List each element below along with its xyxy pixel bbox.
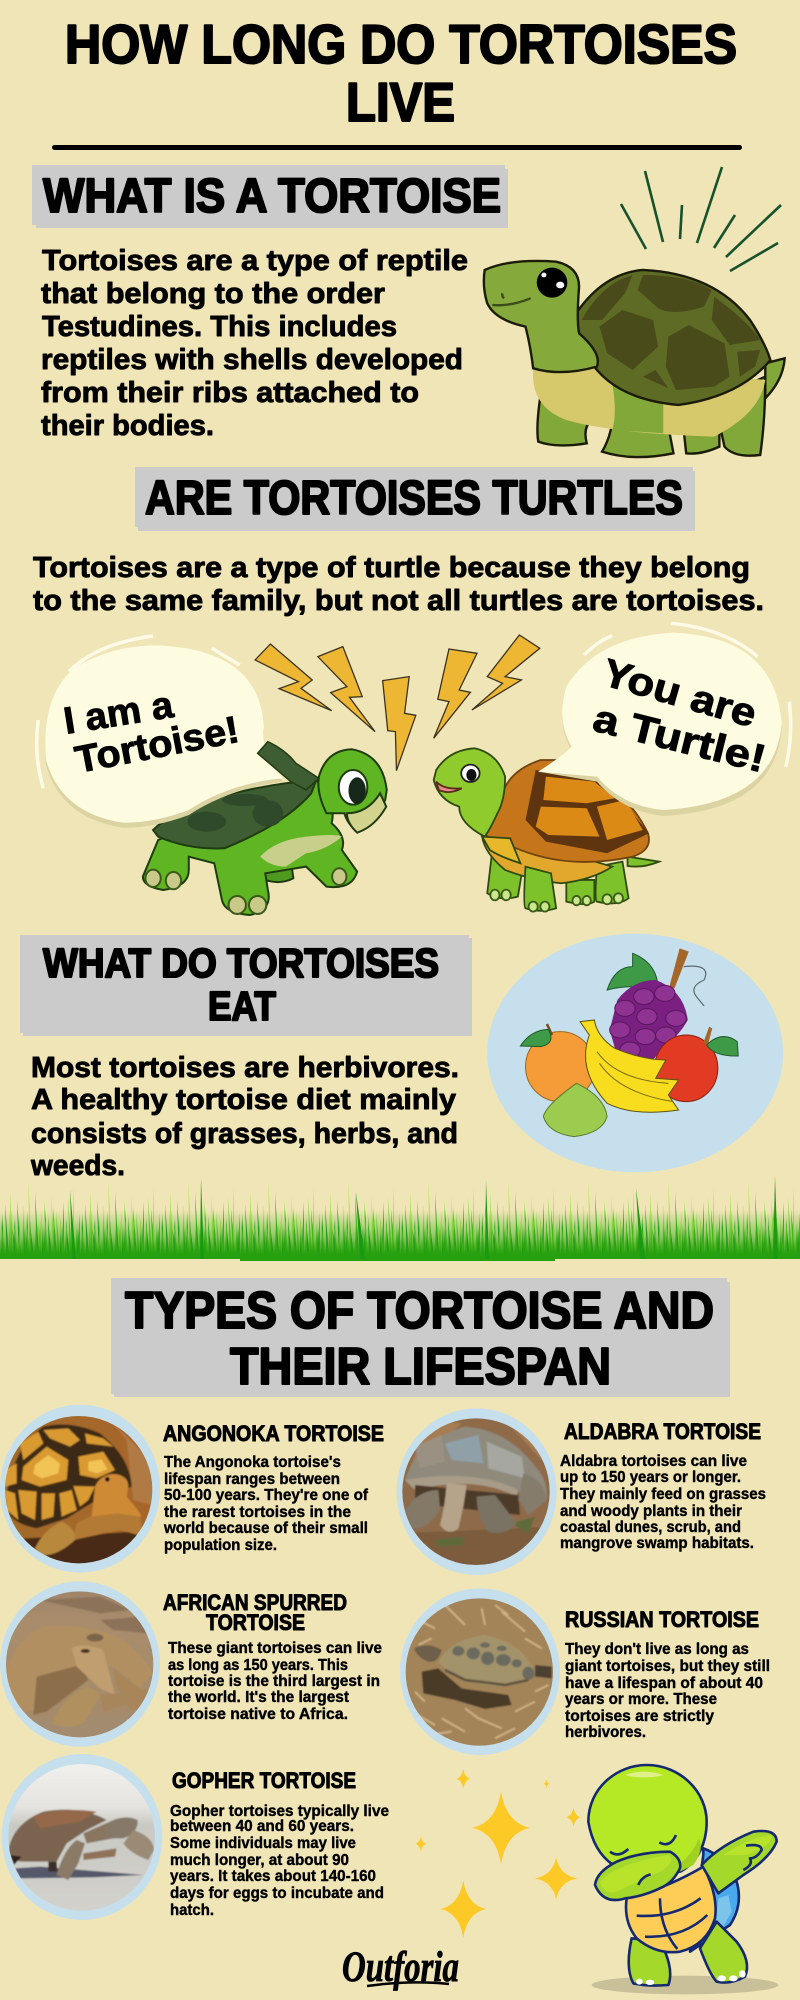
text: what do tortoises eat: A healthy tortoise diet mainly xyxy=(31,1084,456,1116)
text: russian tortoise: herbivores. xyxy=(565,1724,646,1741)
text: what is a tortoise: Tortoises are a type of reptile xyxy=(42,245,468,277)
text: are tortoises turtles: Tortoises are a type of turtle because they belong xyxy=(33,552,750,584)
text: russian tortoise: have a lifespan of about 40 xyxy=(565,1675,763,1692)
name: african spurred tortoise: TORTOISE xyxy=(206,1610,305,1635)
photo: african spurred tortoise xyxy=(0,1581,160,1747)
text: gopher tortoise xyxy=(170,1803,389,1919)
heading: are tortoises turtles: ARE TORTOISES TURTLES xyxy=(145,472,683,525)
text: what do tortoises eat: Most tortoises are herbivores. xyxy=(31,1052,459,1084)
text: what is a tortoise: Testudines. This includes xyxy=(42,311,397,343)
text: angonoka tortoise: world because of their small xyxy=(163,1520,368,1537)
photo: gopher tortoise xyxy=(2,1754,162,1920)
title: HOW LONG DO TORTOISES xyxy=(65,13,737,75)
text: are tortoises turtles: to the same family, but not all turtles are tortoises. xyxy=(33,585,764,617)
text: russian tortoise: giant tortoises, but they still xyxy=(565,1658,770,1675)
text: russian tortoise: They don't live as long as xyxy=(565,1641,749,1658)
heading: types of tortoise: THEIR LIFESPAN xyxy=(230,1338,611,1396)
heading: types of tortoise xyxy=(111,1278,730,1397)
text: angonoka tortoise xyxy=(163,1454,369,1554)
text: angonoka tortoise: lifespan ranges between xyxy=(164,1471,340,1488)
text: what is a tortoise: that belong to the order xyxy=(41,278,385,310)
name: african spurred tortoise: AFRICAN SPURRED xyxy=(163,1590,347,1615)
name: russian tortoise: RUSSIAN TORTOISE xyxy=(565,1607,759,1632)
text: african spurred tortoise: tortoise native to Africa. xyxy=(168,1706,348,1723)
title: LIVE xyxy=(346,71,455,133)
heading: what do tortoises eat: WHAT DO TORTOISES xyxy=(43,940,439,986)
panel: angonoka tortoise xyxy=(0,1405,384,1573)
text: gopher tortoise: years. It takes about 140-160 xyxy=(170,1868,376,1885)
heading: what do tortoises eat: EAT xyxy=(208,983,276,1029)
text: aldabra tortoise: coastal dunes, scrub, and xyxy=(560,1519,741,1536)
panel: aldabra tortoise xyxy=(397,1408,766,1575)
text: gopher tortoise: between 40 and 60 years. xyxy=(170,1818,354,1835)
text: angonoka tortoise: 50-100 years. They're one of xyxy=(164,1487,369,1504)
heading: types of tortoise: TYPES OF TORTOISE AND xyxy=(125,1282,714,1340)
text: russian tortoise: tortoises are strictly xyxy=(565,1708,714,1725)
icon: olive tortoise xyxy=(484,261,785,457)
photo: aldabra tortoise xyxy=(397,1408,557,1575)
text: what do tortoises eat: consists of grasses, herbs, and xyxy=(31,1118,458,1150)
callout: speech bubble left xyxy=(37,636,319,828)
text: angonoka tortoise: The Angonoka tortoise's xyxy=(164,1454,341,1471)
text: gopher tortoise: much longer, at about 90 xyxy=(170,1852,349,1869)
text: gopher tortoise: days for eggs to incubate and xyxy=(170,1885,384,1902)
text: african spurred tortoise: the world. It's the largest xyxy=(168,1689,349,1706)
text: what is a tortoise: reptiles with shells developed xyxy=(41,344,463,376)
grass strip xyxy=(0,1176,800,1261)
panel: gopher tortoise xyxy=(2,1754,389,1920)
icon: orange turtle xyxy=(434,748,659,912)
photo: angonoka tortoise xyxy=(0,1405,160,1573)
name: african spurred tortoise xyxy=(163,1590,347,1635)
text: what do tortoises eat: weeds. xyxy=(30,1150,125,1182)
text: are tortoises turtles xyxy=(33,552,764,617)
name: gopher tortoise: GOPHER TORTOISE xyxy=(172,1768,356,1793)
logo: Outforia: Outforia xyxy=(342,1944,459,1991)
text: aldabra tortoise xyxy=(560,1453,766,1552)
icon: dabbing turtle xyxy=(588,1765,778,1994)
name: angonoka tortoise: ANGONOKA TORTOISE xyxy=(163,1421,384,1446)
icon: green tortoise xyxy=(143,749,387,915)
callout: speech bubble right xyxy=(538,623,791,816)
text: aldabra tortoise: Aldabra tortoises can live xyxy=(560,1453,747,1470)
icon: burst lines xyxy=(621,167,781,271)
name: aldabra tortoise: ALDABRA TORTOISE xyxy=(564,1419,761,1444)
text: african spurred tortoise: tortoise is the third largest in xyxy=(168,1673,380,1690)
text: what do tortoises eat xyxy=(30,1052,459,1182)
callout: speech bubble left: I am a xyxy=(61,684,177,743)
text: what is a tortoise xyxy=(41,245,468,442)
panel: african spurred tortoise xyxy=(0,1581,382,1747)
text: african spurred tortoise: as long as 150 years. This xyxy=(168,1657,348,1674)
text: russian tortoise xyxy=(565,1641,770,1741)
text: aldabra tortoise: They mainly feed on grasses xyxy=(560,1486,766,1503)
text: angonoka tortoise: the rarest tortoises in the xyxy=(164,1504,351,1521)
callout: speech bubble left: Tortoise! xyxy=(72,709,243,782)
panel: russian tortoise xyxy=(400,1588,770,1755)
text: angonoka tortoise: population size. xyxy=(164,1537,277,1554)
callout: speech bubble right: You are xyxy=(598,651,761,736)
icon: sparkles xyxy=(415,1769,581,1938)
text: what is a tortoise: their bodies. xyxy=(41,410,214,442)
text: african spurred tortoise xyxy=(168,1640,382,1723)
title xyxy=(65,13,737,133)
text: what is a tortoise: from their ribs attached to xyxy=(41,377,419,409)
text: russian tortoise: years or more. These xyxy=(565,1691,717,1708)
heading: what is a tortoise: WHAT IS A TORTOISE xyxy=(43,170,501,223)
photo: russian tortoise xyxy=(400,1588,560,1755)
text: gopher tortoise: Gopher tortoises typically live xyxy=(170,1803,389,1820)
text: gopher tortoise: hatch. xyxy=(170,1902,214,1919)
text: aldabra tortoise: and woody plants in their xyxy=(560,1503,742,1520)
text: aldabra tortoise: up to 150 years or longer. xyxy=(560,1469,741,1486)
text: gopher tortoise: Some individuals may live xyxy=(170,1835,356,1852)
text: aldabra tortoise: mangrove swamp habitats. xyxy=(560,1535,754,1552)
icon: fruit bowl xyxy=(487,934,783,1172)
icon: lightning bolts xyxy=(255,635,540,771)
callout: speech bubble right: a Turtle! xyxy=(589,697,770,781)
heading: what do tortoises eat xyxy=(20,935,472,1036)
text: african spurred tortoise: These giant tortoises can live xyxy=(168,1640,382,1657)
